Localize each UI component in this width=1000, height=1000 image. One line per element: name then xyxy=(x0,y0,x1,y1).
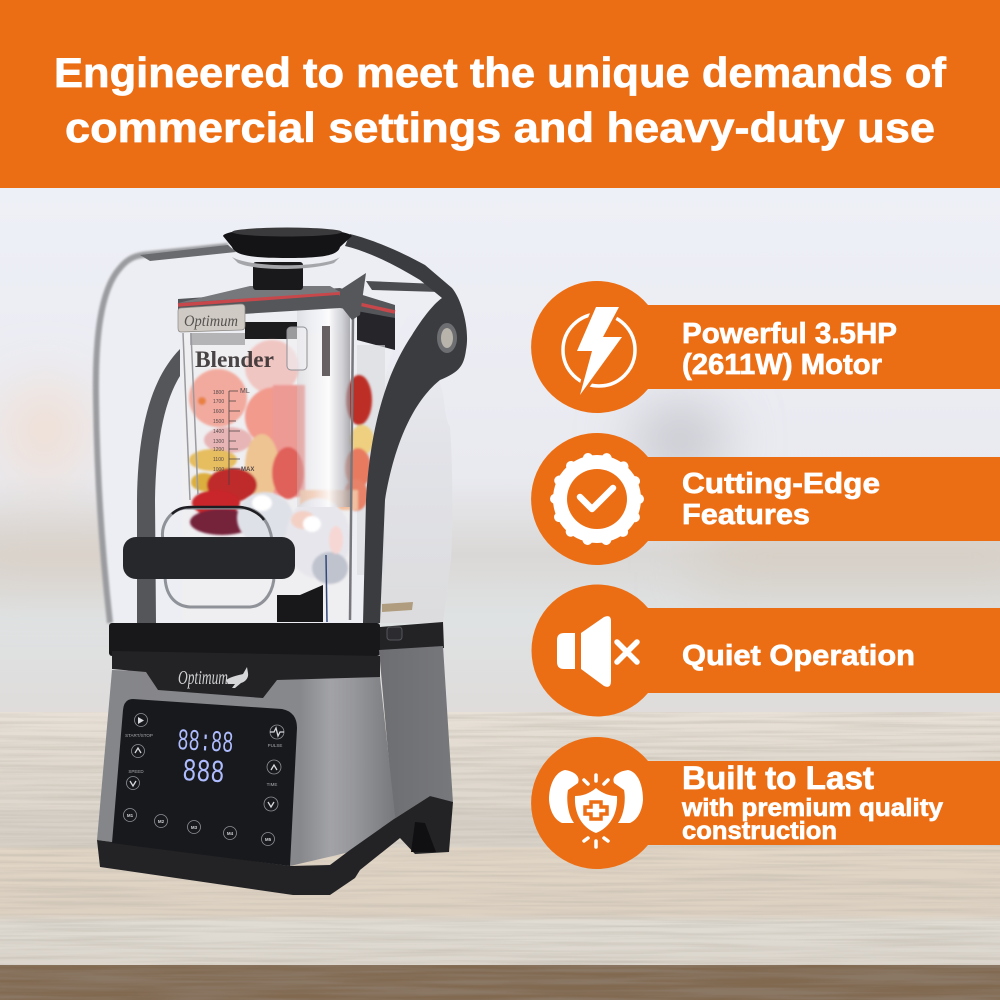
measurement scale: 1100 xyxy=(213,457,224,463)
shroud lid top xyxy=(140,228,352,261)
title: Engineered to meet the unique demands of xyxy=(54,49,947,96)
jar carry handle xyxy=(123,537,295,579)
measurement scale: 1300 xyxy=(213,439,224,445)
feature text: construction xyxy=(682,817,837,845)
button labels: M1 xyxy=(127,813,134,818)
feature 2: cutting-edge xyxy=(531,433,1000,565)
timer display: 88:88 xyxy=(176,725,234,762)
background: wooden table xyxy=(0,712,1000,1000)
rear shroud bar xyxy=(366,281,440,292)
jar label plate xyxy=(178,304,245,332)
jar interior xyxy=(182,303,395,620)
shroud collar xyxy=(109,622,444,656)
button labels: M5 xyxy=(265,837,272,842)
kangaroo logo xyxy=(226,667,248,688)
blender product xyxy=(96,228,467,895)
button glyphs xyxy=(130,728,284,807)
measurement scale: 1400 xyxy=(213,429,224,435)
shroud left edge xyxy=(96,246,228,623)
measurement scale: 1500 xyxy=(213,419,224,425)
title xyxy=(54,49,947,151)
measurement scale: 1700 xyxy=(213,399,224,405)
black plinth xyxy=(97,796,453,895)
measurement scale: MAX xyxy=(241,467,254,473)
feature text xyxy=(681,760,943,845)
motor base front face xyxy=(97,670,396,866)
button labels: M4 xyxy=(227,831,234,836)
rear shroud base plate xyxy=(382,602,413,612)
measurement scale: 1000 xyxy=(213,467,224,473)
rear shroud glass xyxy=(380,370,452,623)
feature 1: motor xyxy=(531,281,1000,413)
logo band: Optimum xyxy=(178,667,228,689)
jar walls xyxy=(183,333,198,500)
front shroud glass xyxy=(96,236,430,623)
feature text xyxy=(682,318,897,381)
feature text: with premium quality xyxy=(681,794,943,822)
jar label plate: Optimum xyxy=(184,313,238,330)
feature 4: built to last xyxy=(531,737,1000,869)
feature text xyxy=(682,468,880,531)
feature text: (2611W) Motor xyxy=(682,349,882,381)
button labels: M3 xyxy=(191,825,198,830)
jar brand text: Blender xyxy=(195,347,274,372)
button labels xyxy=(125,733,282,842)
button labels: M2 xyxy=(158,819,165,824)
feature text: Cutting-Edge xyxy=(682,468,880,500)
button labels: PULSE xyxy=(268,743,282,748)
measurement scale: 1800 xyxy=(213,390,224,396)
measurement scale xyxy=(213,388,254,485)
icon: badge check xyxy=(553,455,641,543)
feature text: Features xyxy=(682,499,810,531)
speed display: 888 xyxy=(181,753,225,792)
button labels: TIME xyxy=(267,782,277,787)
title: commercial settings and heavy-duty use xyxy=(65,104,935,151)
jar lid with red stripe xyxy=(178,273,395,320)
button labels: START/STOP xyxy=(125,733,153,738)
foot recess xyxy=(411,822,436,852)
motor base side face xyxy=(379,646,453,819)
feature text: Powerful 3.5HP xyxy=(682,318,897,350)
shroud hinge bolt xyxy=(437,323,457,353)
button labels: SPEED xyxy=(128,769,144,774)
icon: muted speaker xyxy=(557,616,637,687)
right reflections xyxy=(357,345,385,575)
logo band xyxy=(112,651,380,698)
measurement scale: 1200 xyxy=(213,447,224,453)
background: blurred wall xyxy=(0,188,1000,712)
tamper tube xyxy=(287,307,350,507)
ice cubes xyxy=(237,492,350,584)
measurement scale: ML xyxy=(240,388,250,395)
feature text: Built to Last xyxy=(682,760,874,796)
feature 3: quiet xyxy=(532,584,1000,717)
jar base loop xyxy=(162,508,274,607)
control panel xyxy=(112,699,297,866)
icon: strong shield xyxy=(549,770,643,847)
feature text: Quiet Operation xyxy=(682,640,915,672)
shroud right dark band xyxy=(345,234,467,623)
left inner dark arm xyxy=(137,349,180,623)
base of jar mount xyxy=(277,585,323,622)
touch buttons xyxy=(124,714,284,846)
header banner xyxy=(0,0,1000,188)
measurement scale: 1600 xyxy=(213,409,224,415)
icon: lightning bolt xyxy=(563,307,635,395)
blade shaft collar xyxy=(232,257,340,290)
fruits xyxy=(189,340,374,535)
